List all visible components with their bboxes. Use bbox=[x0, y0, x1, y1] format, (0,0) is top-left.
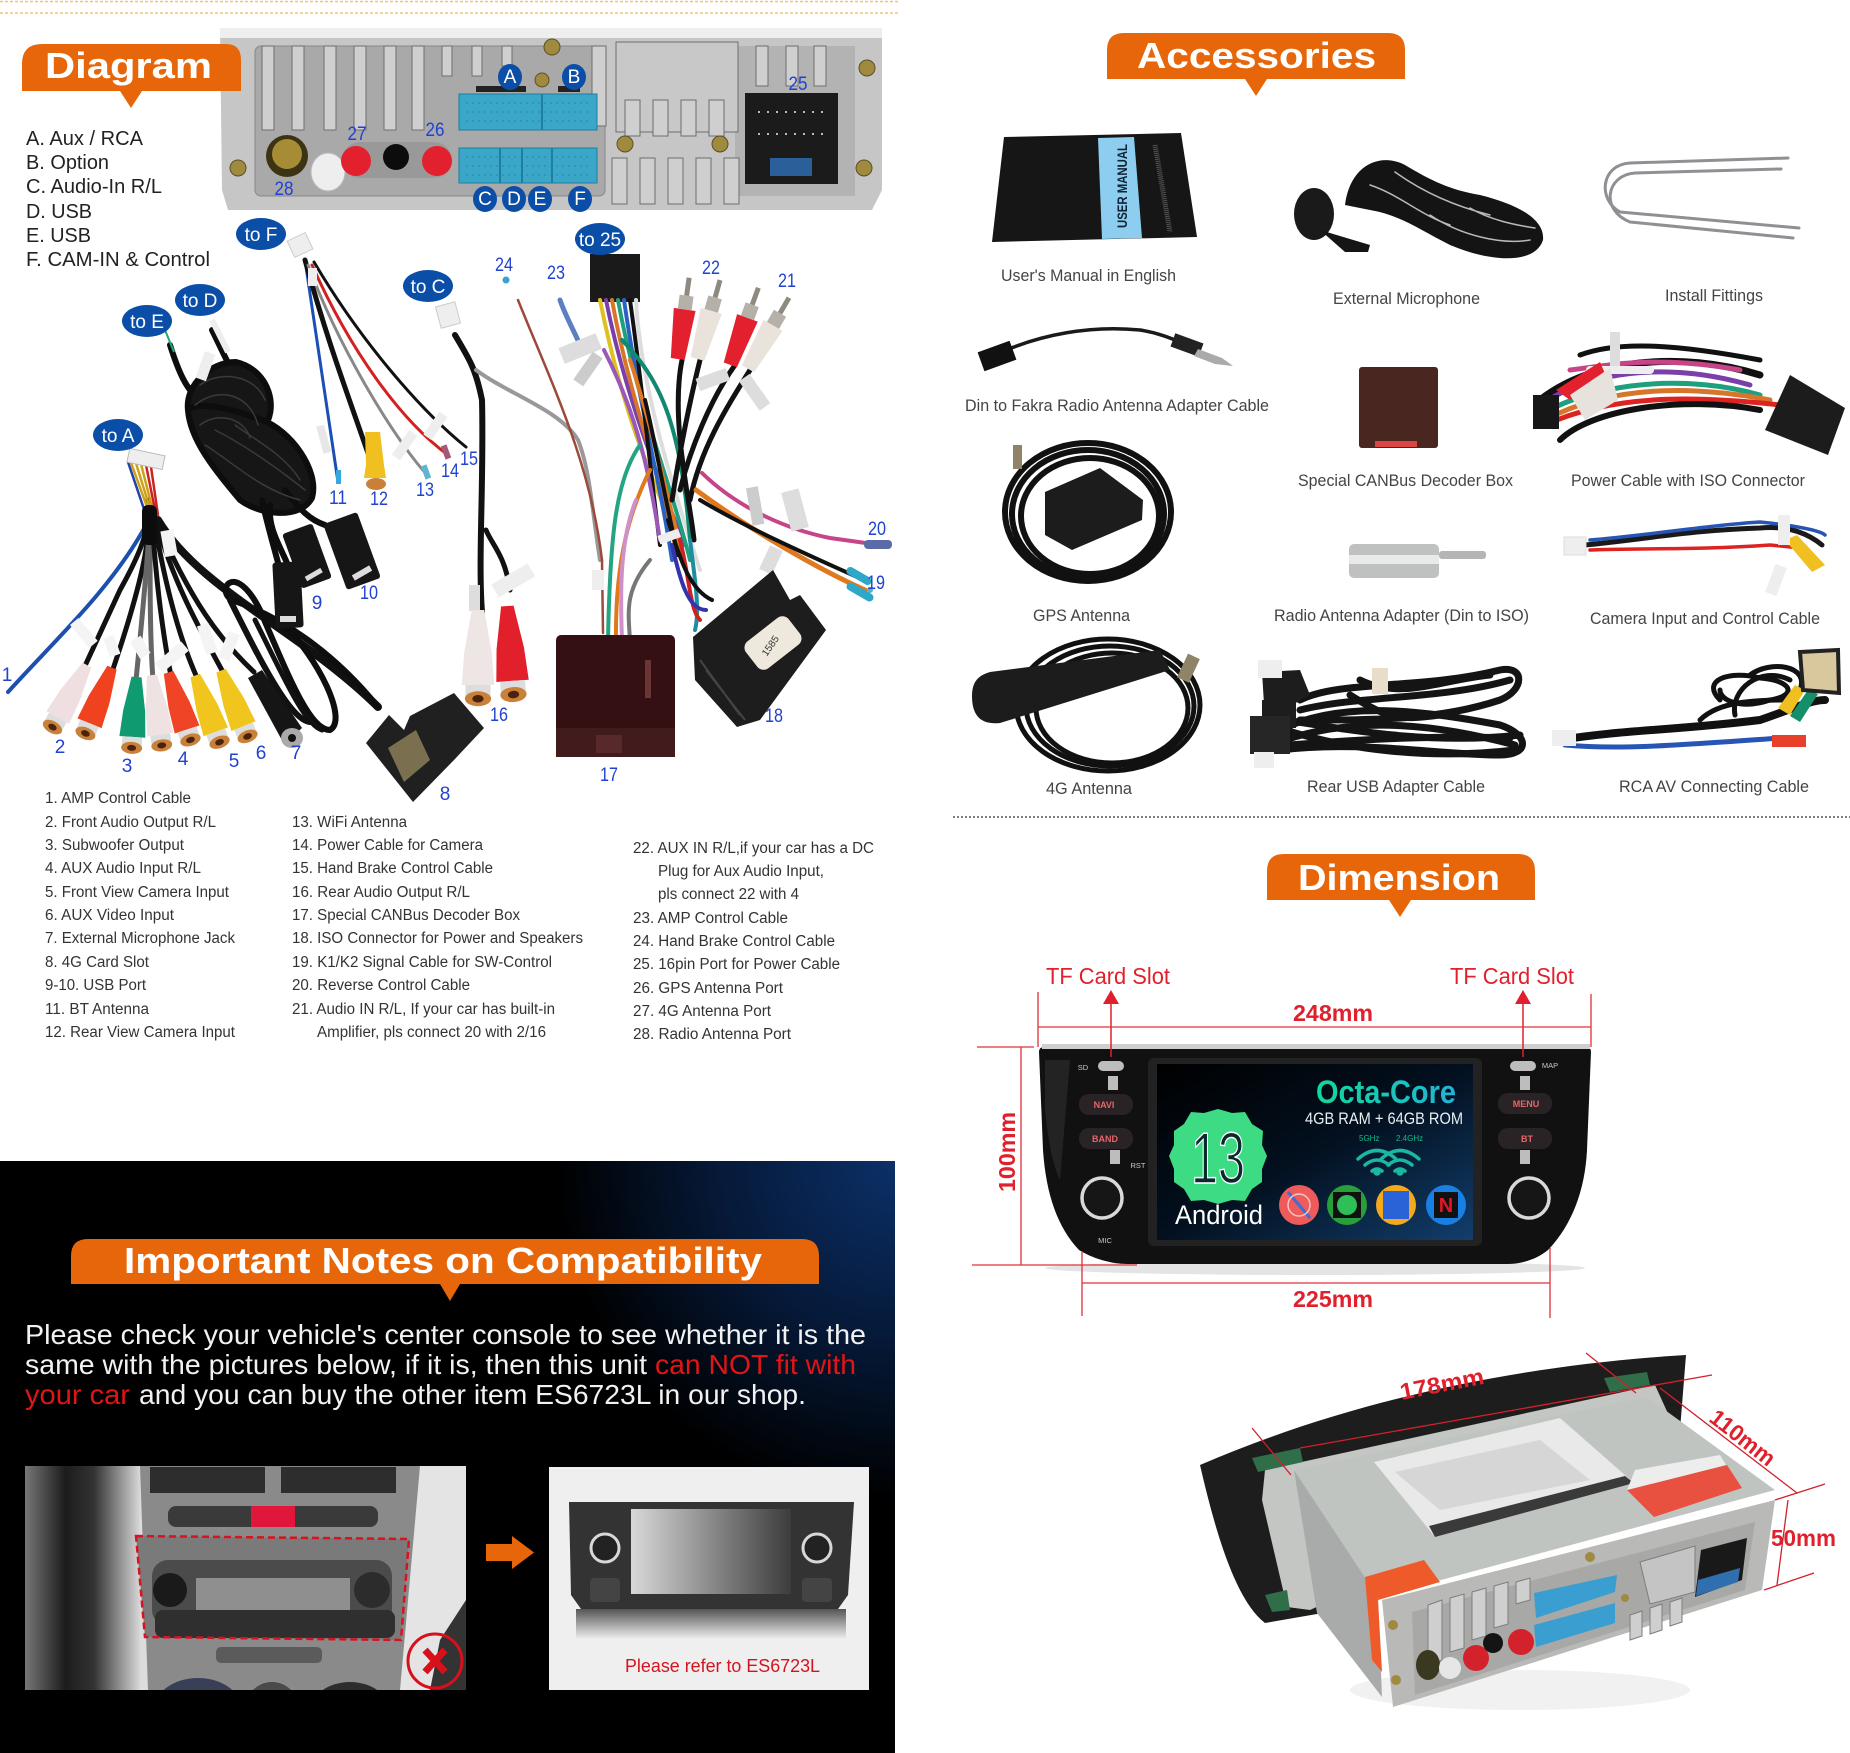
heading: Accessories: Accessories bbox=[1137, 35, 1376, 76]
dimension value labels: 100mm bbox=[994, 1112, 1020, 1192]
loose hand brake and amp wires bbox=[502, 276, 603, 633]
heading: Diagram: Diagram bbox=[45, 45, 212, 86]
user manual bbox=[992, 133, 1197, 285]
connector badges to X bbox=[93, 218, 625, 451]
app icons bbox=[1279, 1185, 1466, 1225]
rear dimension labels bbox=[1398, 1363, 1836, 1551]
legend column 3: 25. 16pin Port for Power Cable bbox=[633, 956, 840, 973]
rear face bbox=[1382, 1500, 1775, 1707]
panel: important notes on compatibility bbox=[0, 1161, 895, 1753]
side buttons: MIC bbox=[1098, 1236, 1112, 1245]
rear dimension labels: 110mm bbox=[1705, 1404, 1781, 1471]
octa-core text bbox=[1305, 1074, 1463, 1143]
legend column 2: 17. Special CANBus Decoder Box bbox=[292, 907, 520, 924]
heading: Dimension bbox=[1267, 854, 1535, 917]
male RCA plugs 21 and 22 bbox=[667, 276, 799, 374]
cable: to C rear audio bbox=[435, 302, 600, 706]
rear USB adapter cable: Rear USB Adapter Cable bbox=[1307, 778, 1485, 796]
dimension value labels bbox=[994, 1000, 1373, 1312]
CANBus decoder box 17 bbox=[556, 635, 675, 757]
port numbers 25 to 28: 26 bbox=[426, 120, 444, 141]
callout numbers 1 to 24: 10 bbox=[360, 583, 378, 604]
port letter badges A to F: D bbox=[507, 189, 521, 210]
camera input and control cable bbox=[1564, 515, 1825, 628]
port key list: A. Aux / RCA bbox=[26, 128, 144, 150]
callout numbers 1 to 24: 2 bbox=[55, 737, 65, 758]
legend column 1 bbox=[45, 790, 236, 1041]
callout numbers 1 to 24: 9 bbox=[312, 593, 322, 614]
compatibility paragraph: your car bbox=[25, 1379, 130, 1410]
legend column 3: 26. GPS Antenna Port bbox=[633, 980, 784, 997]
callout numbers 1 to 24: 19 bbox=[867, 573, 885, 594]
callout numbers 1 to 24: 22 bbox=[702, 258, 720, 279]
dimension lines rear view bbox=[1252, 1353, 1825, 1590]
rotary knobs bbox=[1082, 1178, 1549, 1218]
callout numbers 1 to 24 bbox=[2, 255, 886, 805]
android 13 badge: Android bbox=[1175, 1200, 1263, 1230]
compatibility paragraph bbox=[25, 1319, 866, 1410]
external microphone: External Microphone bbox=[1333, 290, 1480, 308]
callout numbers 1 to 24: 1 bbox=[2, 665, 12, 686]
heading: Important Notes on Compatibility: Important Notes on Compatibility bbox=[124, 1240, 762, 1281]
front view head unit bbox=[1039, 1044, 1591, 1275]
wire tags bbox=[558, 333, 809, 575]
heading: Accessories bbox=[1107, 33, 1405, 96]
photo: alternative head unit ES6723L: Please refer to ES6723L bbox=[625, 1656, 820, 1676]
dimension value labels: 225mm bbox=[1293, 1286, 1373, 1312]
screen bbox=[1157, 1064, 1473, 1240]
legend column 1: 12. Rear View Camera Input bbox=[45, 1024, 236, 1041]
cable: to 25 ISO power harness bbox=[502, 254, 892, 727]
legend column 1: 4. AUX Audio Input R/L bbox=[45, 860, 201, 877]
panel: dimension bbox=[972, 854, 1836, 1710]
PCB edges bbox=[1252, 1372, 1650, 1612]
legend column 1: 8. 4G Card Slot bbox=[45, 954, 150, 971]
compatibility paragraph: and you can buy the other item ES6723L in our shop. bbox=[139, 1379, 806, 1410]
USB sockets bbox=[272, 512, 381, 629]
din to fakra adapter cable: Din to Fakra Radio Antenna Adapter Cable bbox=[965, 397, 1269, 415]
side buttons: BAND bbox=[1092, 1134, 1118, 1144]
app icons: N bbox=[1439, 1195, 1453, 1217]
android 13 badge: 13 bbox=[1191, 1119, 1245, 1199]
decorative top dashed rules bbox=[0, 2, 900, 13]
4G card slot module bbox=[366, 693, 484, 802]
cable labels bbox=[70, 529, 240, 673]
side buttons: SD bbox=[1078, 1063, 1089, 1072]
port key list: F. CAM-IN & Control bbox=[26, 249, 210, 271]
legend column 2 bbox=[292, 814, 583, 1041]
compatibility paragraph: Please check your vehicle's center console to see whether it is the bbox=[25, 1319, 866, 1350]
power cable with ISO connector bbox=[1533, 332, 1845, 490]
power cable with ISO connector: Power Cable with ISO Connector bbox=[1571, 472, 1805, 490]
card slots bbox=[1098, 1061, 1536, 1164]
legend column 2: 15. Hand Brake Control Cable bbox=[292, 860, 493, 877]
TF card slot annotations: TF Card Slot bbox=[1046, 963, 1171, 989]
legend column 3: 24. Hand Brake Control Cable bbox=[633, 933, 835, 950]
icon: wifi bbox=[1358, 1150, 1419, 1174]
install fittings: Install Fittings bbox=[1665, 287, 1763, 305]
callout numbers 1 to 24: 16 bbox=[490, 705, 508, 726]
callout numbers 1 to 24: 5 bbox=[229, 751, 239, 772]
port numbers 25 to 28 bbox=[274, 74, 808, 200]
connector badges to X: to F bbox=[245, 225, 277, 246]
connector badges to X: to 25 bbox=[579, 230, 621, 251]
legend column 3: 28. Radio Antenna Port bbox=[633, 1026, 792, 1043]
connector badges to X: to C bbox=[411, 277, 445, 298]
side buttons bbox=[1078, 1061, 1558, 1245]
RCA AV connecting cable: RCA AV Connecting Cable bbox=[1619, 778, 1809, 796]
callout numbers 1 to 24: 13 bbox=[416, 480, 434, 501]
legend column 3: pls connect 22 with 4 bbox=[658, 886, 799, 903]
port letter badges A to F: A bbox=[504, 67, 517, 88]
blue connector ports bbox=[459, 94, 597, 183]
dimension lines front view bbox=[972, 992, 1591, 1318]
compatibility paragraph: same with the pictures below, if it is, then this unit bbox=[25, 1349, 647, 1380]
legend column 2: 20. Reverse Control Cable bbox=[292, 977, 470, 994]
cable: to A RCA harness bbox=[8, 448, 484, 802]
user manual: User's Manual in English bbox=[1001, 267, 1176, 285]
legend column 2: 21. Audio IN R/L, If your car has built-in bbox=[292, 1001, 555, 1018]
port key list: E. USB bbox=[26, 225, 91, 247]
callout numbers 1 to 24: 17 bbox=[600, 765, 618, 786]
photo: car center console bbox=[25, 1466, 466, 1690]
connector badges to X: to A bbox=[102, 426, 135, 447]
octa-core text: Octa-Core bbox=[1316, 1074, 1456, 1110]
android 13 badge bbox=[1169, 1109, 1267, 1230]
din to fakra adapter cable bbox=[965, 329, 1269, 415]
octa-core text: 5GHz bbox=[1359, 1134, 1379, 1143]
connector badges to X: to D bbox=[183, 291, 217, 312]
CANBus decoder box bbox=[1298, 367, 1514, 490]
legend column 2: 16. Rear Audio Output R/L bbox=[292, 884, 470, 901]
legend column 1: 1. AMP Control Cable bbox=[45, 790, 191, 807]
callout numbers 1 to 24: 14 bbox=[441, 461, 459, 482]
callout numbers 1 to 24: 4 bbox=[178, 749, 189, 770]
octa-core text: 2.4GHz bbox=[1396, 1134, 1423, 1143]
box side and top bbox=[1294, 1470, 1382, 1697]
legend column 1: 9-10. USB Port bbox=[45, 977, 147, 994]
arrow bbox=[486, 1536, 534, 1569]
callout numbers 1 to 24: 12 bbox=[370, 489, 388, 510]
GPS antenna bbox=[1005, 443, 1171, 625]
legend column 3: 23. AMP Control Cable bbox=[633, 910, 788, 927]
legend column 3: Plug for Aux Audio Input, bbox=[658, 863, 824, 880]
port letter badges A to F: E bbox=[534, 189, 546, 210]
heading: Important Notes on Compatibility bbox=[71, 1239, 819, 1301]
user manual: USER MANUAL bbox=[1114, 144, 1130, 228]
rear knobs and port bbox=[1416, 1629, 1534, 1680]
4G antenna: 4G Antenna bbox=[1046, 780, 1133, 798]
warning sticker bbox=[1627, 1465, 1742, 1517]
legend column 1: 3. Subwoofer Output bbox=[45, 837, 185, 854]
panel: diagram section bbox=[0, 2, 900, 1043]
TF card slot annotations: TF Card Slot bbox=[1450, 963, 1575, 989]
port letter badges A to F: F bbox=[574, 189, 586, 210]
screws bbox=[230, 39, 875, 176]
black 16pin port bbox=[745, 93, 838, 184]
callout numbers 1 to 24: 15 bbox=[460, 449, 478, 470]
port key list: C. Audio-In R/L bbox=[26, 176, 162, 198]
side buttons: MENU bbox=[1513, 1099, 1539, 1109]
cable: to D and E USB cables bbox=[165, 320, 381, 629]
4G antenna bbox=[972, 639, 1200, 798]
port numbers 25 to 28: 28 bbox=[274, 179, 294, 200]
callout numbers 1 to 24: 6 bbox=[256, 743, 266, 764]
legend column 1: 11. BT Antenna bbox=[45, 1001, 149, 1018]
callout numbers 1 to 24: 21 bbox=[778, 271, 796, 292]
panel: accessories bbox=[965, 33, 1845, 798]
GPS antenna: GPS Antenna bbox=[1033, 607, 1131, 625]
compatibility paragraph: can NOT fit with bbox=[655, 1349, 856, 1380]
callout numbers 1 to 24: 11 bbox=[329, 488, 347, 509]
callout numbers 1 to 24: 20 bbox=[868, 519, 886, 540]
legend column 1: 5. Front View Camera Input bbox=[45, 884, 230, 901]
rear blue connectors bbox=[1534, 1575, 1617, 1647]
port numbers 25 to 28: 27 bbox=[348, 124, 366, 145]
external microphone bbox=[1294, 160, 1543, 308]
wiring label bbox=[1374, 1418, 1634, 1537]
rear dimension labels: 50mm bbox=[1771, 1525, 1836, 1551]
callout numbers 1 to 24: 8 bbox=[440, 784, 450, 805]
port key list bbox=[26, 128, 210, 271]
rear black connector bbox=[1695, 1538, 1747, 1597]
legend column 1: 6. AUX Video Input bbox=[45, 907, 175, 924]
no-fit cross icon bbox=[408, 1634, 462, 1688]
callout numbers 1 to 24: 18 bbox=[765, 706, 783, 727]
camera input and control cable: Camera Input and Control Cable bbox=[1590, 610, 1820, 628]
connector badges to X: to E bbox=[130, 312, 164, 333]
port letter badges A to F: C bbox=[478, 189, 492, 210]
rear USB adapter cable bbox=[1250, 660, 1522, 796]
callout numbers 1 to 24: 24 bbox=[495, 255, 513, 276]
port numbers 25 to 28: 25 bbox=[788, 74, 808, 95]
rear dimension labels: 178mm bbox=[1398, 1363, 1486, 1405]
callout numbers 1 to 24: 7 bbox=[291, 743, 301, 764]
dimension value labels: 248mm bbox=[1293, 1000, 1373, 1026]
radio antenna adapter: Radio Antenna Adapter (Din to ISO) bbox=[1274, 607, 1529, 625]
callout numbers 1 to 24: 23 bbox=[547, 263, 565, 284]
photo: alternative head unit ES6723L bbox=[549, 1467, 869, 1690]
install fittings bbox=[1605, 158, 1799, 305]
side buttons: NAVI bbox=[1094, 1100, 1114, 1110]
side buttons: RST bbox=[1130, 1161, 1146, 1170]
legend column 2: 18. ISO Connector for Power and Speakers bbox=[292, 930, 583, 947]
port letter badges A to F: B bbox=[568, 67, 580, 88]
legend column 2: 13. WiFi Antenna bbox=[292, 814, 407, 831]
legend column 3: 27. 4G Antenna Port bbox=[633, 1003, 772, 1020]
heading: Diagram bbox=[22, 44, 241, 108]
legend column 3: 22. AUX IN R/L,if your car has a DC bbox=[633, 840, 874, 857]
heading: Dimension: Dimension bbox=[1298, 857, 1500, 898]
port key list: B. Option bbox=[26, 152, 109, 174]
octa-core text: 4GB RAM + 64GB ROM bbox=[1305, 1110, 1463, 1128]
callout numbers 1 to 24: 3 bbox=[122, 756, 132, 777]
RCA plugs bbox=[38, 659, 303, 755]
legend column 1: 2. Front Audio Output R/L bbox=[45, 814, 216, 831]
ISO connector bbox=[693, 570, 826, 727]
rear panel photo of head unit bbox=[220, 28, 882, 210]
rear view head unit bbox=[1200, 1355, 1775, 1710]
radio antenna adapter bbox=[1274, 544, 1529, 625]
legend column 2: 19. K1/K2 Signal Cable for SW-Control bbox=[292, 954, 552, 971]
side buttons: BT bbox=[1521, 1134, 1533, 1144]
TF card slot annotations bbox=[1046, 963, 1575, 1057]
ISO connector: 1585 bbox=[760, 634, 782, 659]
legend column 2: 14. Power Cable for Camera bbox=[292, 837, 483, 854]
legend column 3 bbox=[633, 840, 874, 1043]
legend column 1: 7. External Microphone Jack bbox=[45, 930, 235, 947]
port letter badges A to F bbox=[473, 64, 592, 212]
CANBus decoder box: Special CANBus Decoder Box bbox=[1298, 472, 1514, 490]
port key list: D. USB bbox=[26, 201, 92, 223]
side buttons: MAP bbox=[1542, 1061, 1558, 1070]
section divider bbox=[953, 816, 1850, 818]
antenna ports bbox=[266, 135, 452, 191]
cable: to F camera and control bbox=[287, 233, 466, 490]
legend column 2: Amplifier, pls connect 20 with 2/16 bbox=[317, 1024, 546, 1041]
RCA AV connecting cable bbox=[1552, 650, 1839, 796]
